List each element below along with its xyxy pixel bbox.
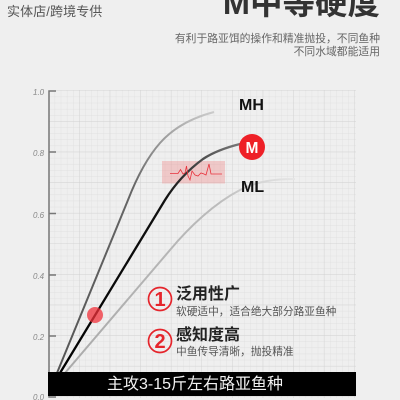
store note: 实体店/跨境专供 (7, 4, 102, 19)
curve M (60, 144, 240, 373)
curve ML (65, 179, 295, 373)
feature 2 heading: 感知度高 (176, 327, 240, 344)
pulse highlight box (162, 161, 225, 184)
y axis: 0.4 (33, 272, 45, 281)
feature 2 number: 2 (154, 331, 166, 353)
curve MH (57, 112, 214, 373)
feature 1 heading: 泛用性广 (176, 286, 240, 303)
feature 1 text: 软硬适中，适合绝大部分路亚鱼种 (176, 306, 336, 318)
subtitle (175, 32, 380, 58)
y axis (33, 88, 56, 400)
feature 2 number (148, 330, 172, 353)
y axis: 0.6 (33, 211, 45, 220)
bottom banner: 主攻3-15斤左右路亚鱼种 (107, 376, 283, 393)
subtitle: 有利于路亚饵的操作和精准抛投，不同鱼种 (175, 33, 380, 45)
label MH: MH (239, 97, 264, 114)
y axis: 0.2 (33, 333, 45, 342)
subtitle: 不同水域都能适用 (294, 46, 380, 58)
label M badge (239, 134, 265, 160)
y axis: 1.0 (33, 88, 45, 97)
pulse line (170, 164, 222, 180)
bottom banner (48, 372, 356, 396)
feature 1 number (148, 288, 172, 311)
label ML: ML (241, 179, 264, 196)
feature 2 text: 中鱼传导清晰，抛投精准 (176, 346, 294, 358)
label M badge: M (246, 140, 258, 157)
marker: red dot (87, 307, 103, 323)
y axis: 0.8 (33, 149, 45, 158)
feature 1 number: 1 (154, 289, 166, 311)
